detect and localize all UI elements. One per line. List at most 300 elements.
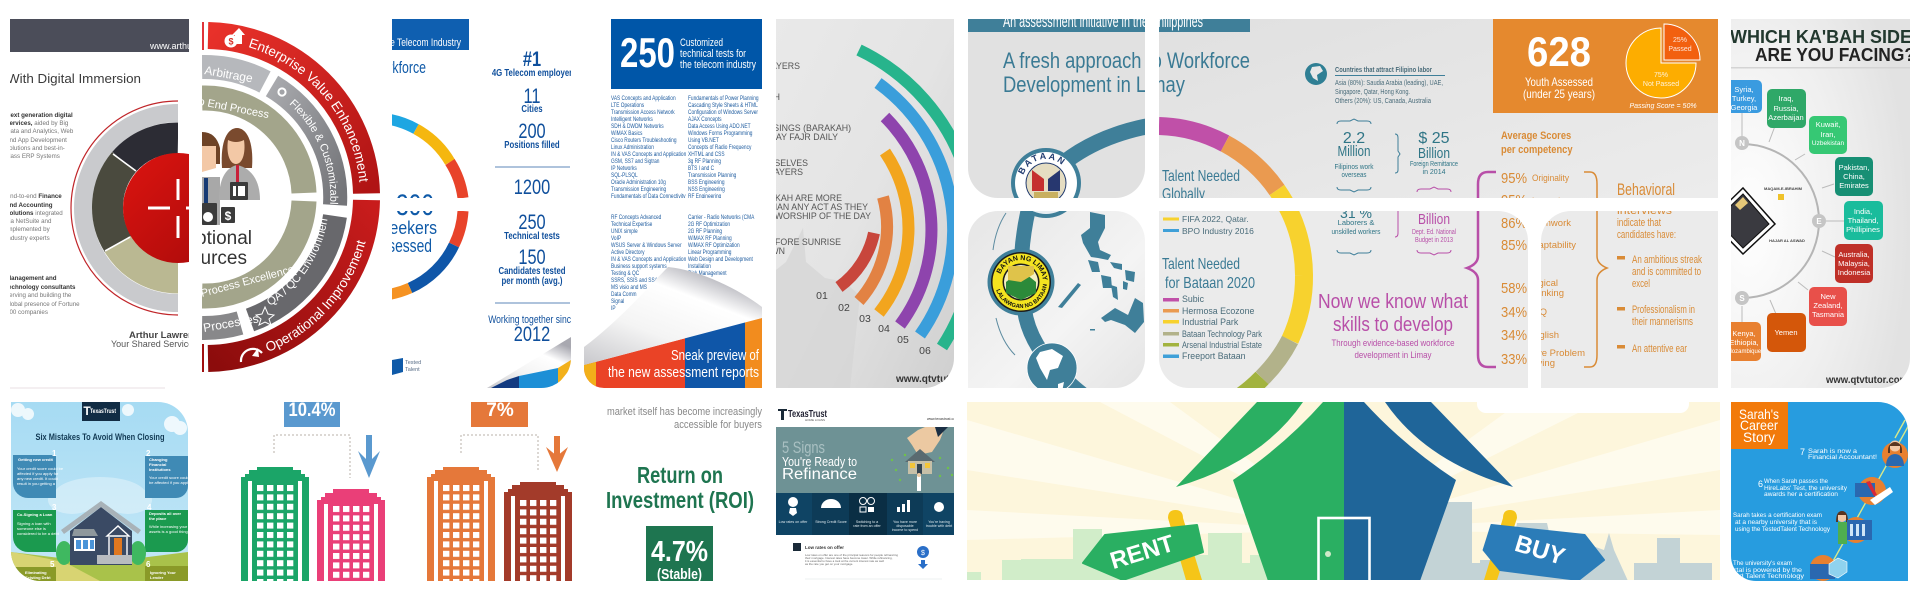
text block: finance solutions: End-to-end Finance [6, 193, 62, 200]
footer rule [10, 388, 165, 389]
legend: Bataan: Bataan Technology Park [1182, 329, 1263, 339]
brand name [111, 332, 189, 347]
globe [1027, 343, 1077, 393]
ROI box: 4.7% [651, 536, 708, 568]
test list left, lower: Signal [611, 299, 624, 305]
section: low rates on offer [793, 543, 942, 580]
legend: Bataan: Industrial Park [1182, 317, 1239, 327]
door [1318, 518, 1370, 586]
gap strip [683, 198, 721, 200]
brand name: Your Shared Services [111, 339, 198, 349]
pie chart: 25% [1673, 37, 1687, 44]
career steps: Tested Talent Technology [1722, 574, 1804, 580]
compass ring: S [1739, 294, 1745, 303]
legend: global [1163, 214, 1254, 236]
map: Philippines [1058, 212, 1144, 333]
text block: digital services: Data and Analytics, Web [6, 128, 74, 135]
panel: prayer arcs: DAWN [758, 246, 785, 256]
bullets: their mannerisms [1632, 316, 1693, 328]
logo [778, 409, 958, 422]
direction cards: Iraq, [1778, 94, 1794, 103]
scores top: 95% [1501, 170, 1527, 187]
direction cards: Phillipines [1846, 225, 1880, 234]
panel: telecom workforce ring [392, 19, 469, 375]
test list right, lower: 2G RF Planning [688, 229, 722, 235]
dividers [495, 167, 570, 303]
stats text: 250 [518, 210, 546, 233]
heading: talent needed 2020: for Bataan 2020 [1165, 275, 1255, 292]
cards: mistakes: Your credit score could be [17, 466, 64, 471]
hero band: 5 Signs [782, 438, 825, 457]
magenta callout: Now we know what [1318, 291, 1468, 313]
competency labels: Logical [1528, 278, 1558, 289]
gray ring segments [202, 67, 335, 328]
seal: Limay: LALAWIGAN NG BATAAN [996, 284, 1047, 308]
header: the telecom industry [680, 59, 756, 71]
panel: skills analysis, top [1003, 12, 1718, 275]
panel: prayer arcs: WORSHIP OF THE DAY [775, 211, 871, 221]
cards: mistakes: Signing a loan with [17, 521, 51, 526]
test list right, lower [688, 214, 754, 276]
page curl [487, 337, 571, 388]
cards: mistakes: Co-Signing a Loan [17, 512, 53, 517]
center heading: Resources [156, 248, 247, 269]
cards: mistakes: 6 [146, 560, 151, 569]
header band: An assessment initiative in the Philippines [1003, 12, 1203, 31]
icon row: rate from an offer [853, 524, 882, 528]
bottom half: Tested [405, 360, 421, 366]
competency labels: Thinking [1528, 288, 1564, 299]
section: low rates on offer: Low rates on offer are one of the principal reasons for people refinancing [805, 553, 898, 557]
wheel chart [70, 100, 189, 316]
arc numbers: 03 [859, 313, 871, 325]
direction cards: Ethiopia, [1729, 338, 1759, 347]
test list left, lower [611, 215, 686, 312]
heading: behavioral: Behavioral [1617, 180, 1675, 199]
direction cards: Georgia [1731, 103, 1758, 112]
title [1730, 27, 1915, 65]
gray ring labels: Processes [202, 311, 260, 335]
competency labels: Solving [1524, 358, 1555, 369]
direction cards: India, [1854, 207, 1872, 216]
cards: mistakes: 5 [50, 560, 55, 569]
arc numbers [816, 290, 931, 357]
direction cards: Pakistan, [1839, 163, 1869, 172]
orange stat block: Youth Assessed [1525, 75, 1593, 89]
stat: laborers: 31 % [1340, 205, 1372, 221]
competency labels: IQ [1537, 307, 1547, 318]
cards: mistakes: Lender [150, 575, 164, 580]
arc numbers: 01 [816, 290, 828, 302]
logo: www.texastrust.com [927, 417, 958, 421]
legend: Bataan: Hermosa Ecozone [1182, 306, 1254, 316]
scores top: Originality [1532, 173, 1569, 184]
legend: Bataan [1163, 294, 1263, 361]
heading tail: A fresh approach to Workforce [1003, 48, 1250, 73]
test list right, upper: Fundamentals of Power Planning [688, 96, 759, 102]
panel: skills analysis, bottom left [1159, 190, 1528, 406]
career steps: 6 [1758, 479, 1763, 489]
skyline: right [1420, 502, 1712, 581]
scores bottom: 34% [1501, 304, 1527, 321]
arc numbers: 06 [919, 345, 931, 357]
bullets: and is committed to [1632, 266, 1701, 278]
test list left, upper: IN & VAS Concepts and Application [611, 152, 686, 158]
career steps: using the TestedTalent Technology [1735, 527, 1830, 533]
bullets: excel [1632, 278, 1650, 290]
bracket: magenta top [1478, 172, 1496, 198]
panel: prayer arcs [776, 19, 954, 388]
legend: Bataan: Subic [1182, 294, 1205, 304]
direction cards: Azerbaijan [1768, 113, 1804, 122]
text: market accessible [607, 406, 762, 431]
test list right, upper: 3g RF Planning [688, 159, 721, 165]
test list left, lower: IP [611, 306, 616, 312]
test list right, upper: XHTML and CSS [688, 152, 725, 158]
text: market accessible: accessible for buyers [674, 419, 762, 431]
scores top [1501, 170, 1569, 209]
heading: talent needed globally [1162, 168, 1240, 203]
hero band [776, 427, 954, 493]
bracket and arrow: orange [461, 435, 568, 472]
test list right, upper: Concepts of Radio Frequency [688, 145, 752, 151]
bracket: magenta bottom [1467, 211, 1496, 367]
stats text: #1 [523, 47, 541, 70]
cards: mistakes: Institutions [149, 467, 171, 472]
scores bottom [1501, 215, 1527, 368]
icon row: Switching to a [856, 520, 878, 524]
cards: mistakes: Your credit score could [149, 475, 190, 480]
test list left, lower: SSRS, SSIS and SSAS [611, 278, 661, 284]
competency labels: English [1528, 330, 1559, 341]
text block: digital services: Next generation digital [6, 112, 73, 119]
heading: average scores: Average Scores [1501, 130, 1572, 142]
text items [776, 62, 850, 175]
bottom half [392, 211, 468, 375]
magenta callout [1318, 291, 1468, 361]
interview text [1617, 205, 1676, 241]
text block: consultants: technology consultants [6, 284, 76, 291]
house: right half [1344, 402, 1513, 581]
sun rays [967, 402, 1720, 540]
text block: finance solutions [10, 194, 62, 242]
panel: Bataan, top half [968, 19, 1145, 198]
panel: Bataan, bottom half [968, 211, 1145, 388]
stat: 25 billion: $ 25 [1418, 130, 1450, 147]
cards: mistakes: considered to be a debt [17, 531, 60, 536]
header bar [10, 19, 189, 52]
icon row [776, 493, 954, 535]
career steps: awards her a certification [1764, 492, 1838, 498]
test list left, lower: Data Comm [611, 292, 637, 298]
mosque silhouette [776, 228, 860, 388]
icon: business people: $ [225, 209, 232, 223]
cards: mistakes: 3 [52, 503, 57, 512]
olive ring labels: Process Excellence [200, 263, 296, 300]
scores top: Innovation [1532, 196, 1569, 207]
cards: mistakes: assets is a good thing [149, 529, 188, 534]
logo: TexasTrust [788, 409, 828, 420]
heading: talent needed 2020: Talent Needed [1162, 256, 1240, 273]
direction cards: Indonesia [1838, 268, 1871, 277]
legend: Bataan: Freeport Bataan [1182, 351, 1246, 361]
text items: H [774, 92, 780, 102]
text block: consultants: Management and [6, 275, 57, 282]
test list right, upper [688, 96, 759, 200]
page curl with colour strip [584, 267, 762, 388]
stats text: Cities [521, 103, 543, 114]
stat: education budget [1395, 211, 1456, 255]
brand name: Arthur Lawrence [129, 330, 204, 341]
stat: education budget: Budget in 2013 [1415, 237, 1453, 244]
compass ring [1735, 113, 1844, 322]
heading: With Digital Immersion [7, 71, 141, 86]
test list right, upper: BSS Engineering [688, 180, 724, 186]
stat: 2.2 million: 2.2 [1343, 130, 1365, 147]
text items: THEMSELVES [750, 158, 808, 168]
curl caption: Sneak preview of [671, 347, 760, 364]
test list right, upper: AJAX Concepts [688, 117, 722, 123]
direction cards: Yemen [1774, 328, 1798, 337]
text block: consultants [6, 275, 80, 316]
title: ARE YOU FACING? [1755, 45, 1915, 65]
text items: DAY FAJR DAILY [770, 132, 838, 142]
title box [1731, 402, 1788, 449]
test list right, lower: Risk Management [688, 271, 727, 277]
url: www.qtvtutor.com [895, 374, 982, 385]
stat: laborers [1332, 205, 1381, 255]
cards: mistakes: the place [149, 516, 167, 521]
career steps: Sarah takes a certification exam [1733, 513, 1822, 519]
direction cards: Uzbekistan [1812, 140, 1844, 147]
bullets [1617, 254, 1702, 355]
heading tail [1003, 48, 1250, 97]
building: green [241, 467, 309, 581]
test list right, upper: BTS I and C [688, 166, 714, 172]
building: pink [317, 489, 385, 581]
career steps: 7 [1800, 447, 1805, 457]
panel: 250 technical tests [584, 19, 762, 388]
scores top: 95% [1501, 192, 1527, 209]
panel: optional resources wheel [202, 22, 380, 372]
icon: business people [202, 128, 260, 225]
test list left, lower: MS visio and MS [611, 285, 647, 291]
heading: A fresh approach to Workforce [1003, 48, 1250, 73]
icon row: income to spend [892, 528, 918, 532]
curl caption [608, 347, 760, 381]
text block: finance solutions: via NetSuite and [6, 218, 52, 225]
stats text: per month (avg.) [501, 275, 563, 286]
test list right, upper: Windows Forms Programming [688, 131, 752, 137]
text block: countries: Others (20%): US, Canada, Australia [1335, 98, 1431, 105]
test list left, upper: SDH & DWDM Networks [611, 124, 664, 130]
test list left, upper: GSM, SS7 and Sigtran [611, 159, 659, 165]
pie chart: Passing Score = 50% [1629, 103, 1697, 110]
test list left, lower: UNIX simple [611, 229, 638, 235]
icon row: Strong Credit Score [815, 520, 847, 524]
stats text: Technical tests [504, 230, 560, 241]
panel: rent or buy [967, 394, 1720, 586]
header: technical tests for [680, 48, 746, 60]
callout: 10.4 percent [284, 395, 340, 427]
test list right, lower: WiMAX RF Planning [688, 236, 732, 242]
bottom half: Seekers [379, 218, 437, 238]
stat: 2.2 million: Million [1338, 143, 1370, 160]
direction cards: Zealand, [1813, 301, 1843, 310]
center heading [202, 230, 251, 264]
title: WHICH KA'BAH SIDE [1730, 27, 1912, 47]
direction cards: China, [1843, 172, 1865, 181]
panel: signs to refinance [776, 409, 958, 580]
outer ring: operational improvement: Operational Improvement [266, 240, 366, 351]
arc chart [836, 44, 954, 350]
icon row: trouble with debt [926, 524, 952, 528]
panel: prayer arcs: BEFORE SUNRISE [763, 237, 841, 247]
cards: mistakes: Financial [149, 462, 166, 467]
text block: countries: Asia (80%): Saudia Arabia (leading), UAE, [1335, 80, 1443, 87]
interview text: indicate that [1617, 217, 1661, 229]
cards: mistakes: any new credit. It could [17, 476, 58, 481]
interview text: candidates have: [1617, 229, 1676, 241]
ground [11, 552, 188, 581]
magenta callout: development in Limay [1354, 350, 1432, 361]
stats text: 2012 [514, 322, 550, 345]
bottom half: 300 [396, 189, 434, 222]
direction cards: New [1820, 292, 1836, 301]
heading: talent needed 2020 [1162, 256, 1255, 292]
competency labels: Creative Problem [1512, 348, 1585, 359]
direction cards: Kenya, [1732, 329, 1756, 338]
header band: An assessment initiative in the Philippines [1003, 12, 1203, 31]
timeline line [1822, 420, 1910, 581]
gap strip over stats [471, 198, 571, 211]
text block: finance solutions: implemented by [6, 226, 51, 233]
heading: talent needed globally: Talent Needed [1162, 168, 1240, 185]
test list left, upper: Cisco Routers Troubleshooting [611, 138, 676, 144]
text: market accessible: market itself has become increasingly [607, 406, 762, 418]
olive ring [202, 98, 304, 296]
panel: buildings and ROI [241, 395, 762, 583]
magenta brace top [1417, 187, 1451, 192]
ring chart top [1159, 126, 1304, 275]
direction cards: Australia, [1838, 250, 1870, 259]
icon row: Low rates on offer [779, 520, 808, 524]
section: low rates on offer: $ [921, 550, 925, 557]
seal: Limay [988, 249, 1054, 316]
pie chart [1626, 24, 1700, 110]
ring chart bottom [1225, 190, 1304, 406]
test list left, upper: IP Networks [611, 166, 637, 172]
stat: 25 billion: Foreign Remittance [1410, 161, 1458, 168]
heading: average scores [1501, 130, 1573, 156]
bracket: orange top [1584, 172, 1597, 198]
hero band: You're Ready to [782, 454, 857, 469]
text block: digital services: services, aided by Big [6, 120, 69, 127]
title box: Story [1743, 429, 1775, 445]
competency labels: Teamwork [1528, 218, 1571, 229]
house: left half [1176, 402, 1344, 581]
test list right, lower: Web Design and Development [688, 257, 753, 263]
skyline: left [967, 529, 1270, 581]
title: Six Mistakes To Avoid When Closing [36, 432, 165, 443]
text items: PRAYERS [762, 167, 803, 177]
panel: prayer arcs: THAN ANY ACT AS THEY [765, 202, 868, 212]
direction cards: Russia, [1773, 104, 1799, 113]
url: www.qtvtutor.com [1825, 375, 1908, 386]
title box: Sarah's [1739, 406, 1779, 422]
section: low rates on offer: as the rate you get on your mortgage. [805, 562, 853, 566]
cards: mistakes: 4 [147, 503, 152, 512]
heading: Development in Limay [1003, 72, 1185, 97]
direction cards: Iran, [1820, 130, 1836, 139]
stats text: 4G Telecom employer [492, 67, 573, 78]
direction cards: Tasmania [1812, 310, 1845, 319]
test list left, upper: Intelligent Networks [611, 117, 653, 123]
bullets: An ambitious streak [1632, 254, 1702, 266]
landmarks [1764, 186, 1805, 243]
panel: Sarah's career story [1722, 402, 1910, 581]
compass ring: N [1739, 139, 1745, 148]
top half: Workforce [370, 58, 426, 77]
callout: 10.4 percent: 10.4% [288, 400, 336, 421]
cards: mistakes: 1 [52, 449, 57, 458]
panel: prayer arcs: RAKAH ARE MORE [763, 193, 842, 203]
section: low rates on offer: Low rates on offer [805, 545, 844, 550]
cards: mistakes [11, 449, 190, 581]
outer ring: operational improvement [202, 200, 380, 372]
teal ring [1021, 195, 1090, 400]
outer ring: enterprise value: Enterprise Value Enhancement [249, 38, 368, 182]
test list right, upper: Cascading Style Sheets & HTML [688, 103, 758, 109]
icon: hand with house [891, 427, 953, 491]
stat: 25 billion [1395, 130, 1458, 176]
text block: consultants: global presence of Fortune [6, 301, 80, 308]
competency labels [1512, 218, 1585, 369]
competency labels: Adaptability [1527, 240, 1576, 251]
seal: Bataan: BATAAN [1018, 152, 1065, 174]
orange stat block: (under 25 years) [1523, 87, 1595, 101]
test list left, lower: Testing & QC [611, 271, 639, 277]
bracket and arrow: blue [274, 435, 380, 478]
title box: Career [1740, 417, 1778, 433]
direction cards: Turkey, [1732, 94, 1756, 103]
test list left, upper [611, 96, 686, 200]
career steps: at a nearby university that is [1735, 520, 1817, 526]
test list right, upper: RF Engineering [688, 194, 721, 200]
heading: talent needed globally: Globally [1162, 186, 1205, 203]
cards: mistakes: Getting new credit [18, 457, 54, 462]
cards: mistakes: be affected if you apply [149, 480, 190, 485]
cards: mistakes: Deposits all over [149, 511, 181, 516]
stats text: Working together since [488, 314, 576, 326]
heading: return on investment: Return on [637, 462, 723, 488]
career steps [1722, 447, 1877, 580]
compass ring: E [1816, 217, 1822, 226]
bottom half: Assessed [372, 236, 432, 256]
stat: education budget: Billion [1418, 211, 1450, 228]
test list left, lower: RF Concepts Advanced [611, 215, 661, 221]
icon row: You're having [928, 520, 950, 524]
outer ring: enterprise value [202, 22, 380, 194]
test list left, lower: Business support systems [611, 264, 667, 270]
stat: education budget: Dept. Ed. National [1412, 229, 1456, 236]
legend: Bataan: Arsenal Industrial Estate [1182, 340, 1262, 350]
section: low rates on offer: their mortgage. Interest rates have become lower. While refinancing, [805, 556, 893, 560]
career steps: portal is powered by the [1726, 568, 1803, 574]
stats text: 11 [523, 84, 541, 107]
panel: six closing mistakes [11, 402, 190, 581]
test list left, lower: Active Directory [611, 250, 645, 256]
